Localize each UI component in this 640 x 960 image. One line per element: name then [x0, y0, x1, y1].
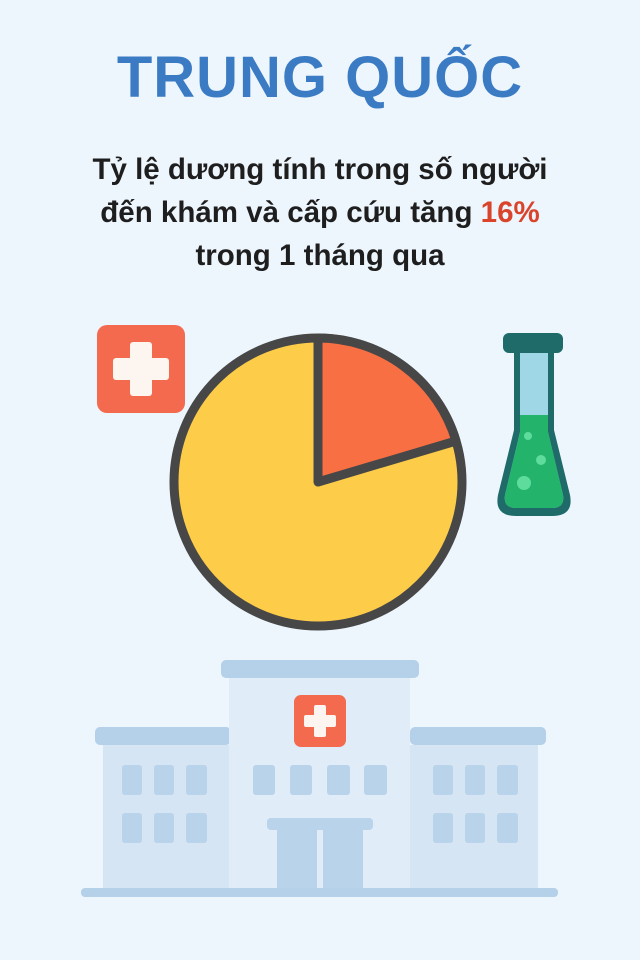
- pie chart: [174, 338, 462, 626]
- subtitle text: Tỷ lệ dương tính trong số người: [92, 153, 548, 186]
- title: TRUNG QUỐC: [117, 45, 523, 110]
- subtitle text: [92, 153, 548, 272]
- subtitle text: trong 1 tháng qua: [195, 239, 445, 272]
- icon: flask: [497, 333, 571, 516]
- subtitle text: đến khám và cấp cứu tăng 16%: [100, 196, 540, 229]
- icon: medical cross: [97, 325, 185, 413]
- hospital building: [81, 660, 558, 897]
- icon: hospital cross: [294, 695, 346, 747]
